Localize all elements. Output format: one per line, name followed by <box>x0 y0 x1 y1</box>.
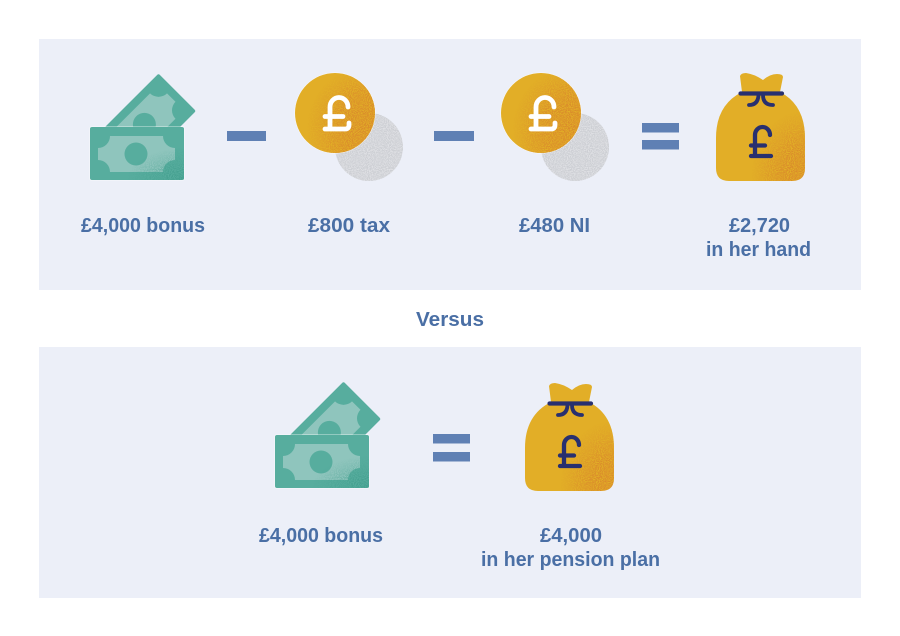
minus sign 1 <box>227 131 266 141</box>
label: pension amount: in her pension plan <box>481 548 660 571</box>
icon: coin with tax <box>294 72 403 181</box>
panel: pension calculation <box>39 347 861 598</box>
icon: money bag <box>716 73 805 181</box>
label: take home amount <box>706 214 811 261</box>
equals sign <box>433 434 470 462</box>
label: tax: £800 tax <box>308 214 391 237</box>
label: national insurance: £480 NI <box>519 214 590 237</box>
minus sign 2 <box>434 131 474 141</box>
label: pension amount <box>481 524 660 571</box>
icon: coin with national insurance <box>500 72 609 181</box>
label: bonus: £4,000 bonus <box>259 524 383 547</box>
label: take home amount: in her hand <box>706 238 811 261</box>
label: bonus: £4,000 bonus <box>81 214 205 237</box>
equals sign <box>642 123 679 150</box>
icon: banknotes <box>274 382 381 488</box>
label: take home amount: £2,720 <box>729 214 790 237</box>
panel: cash in hand calculation <box>39 39 861 290</box>
icon: banknotes <box>90 74 196 180</box>
icon: money bag <box>525 383 614 491</box>
heading: versus: Versus <box>416 308 484 331</box>
label: pension amount: £4,000 <box>540 524 602 547</box>
